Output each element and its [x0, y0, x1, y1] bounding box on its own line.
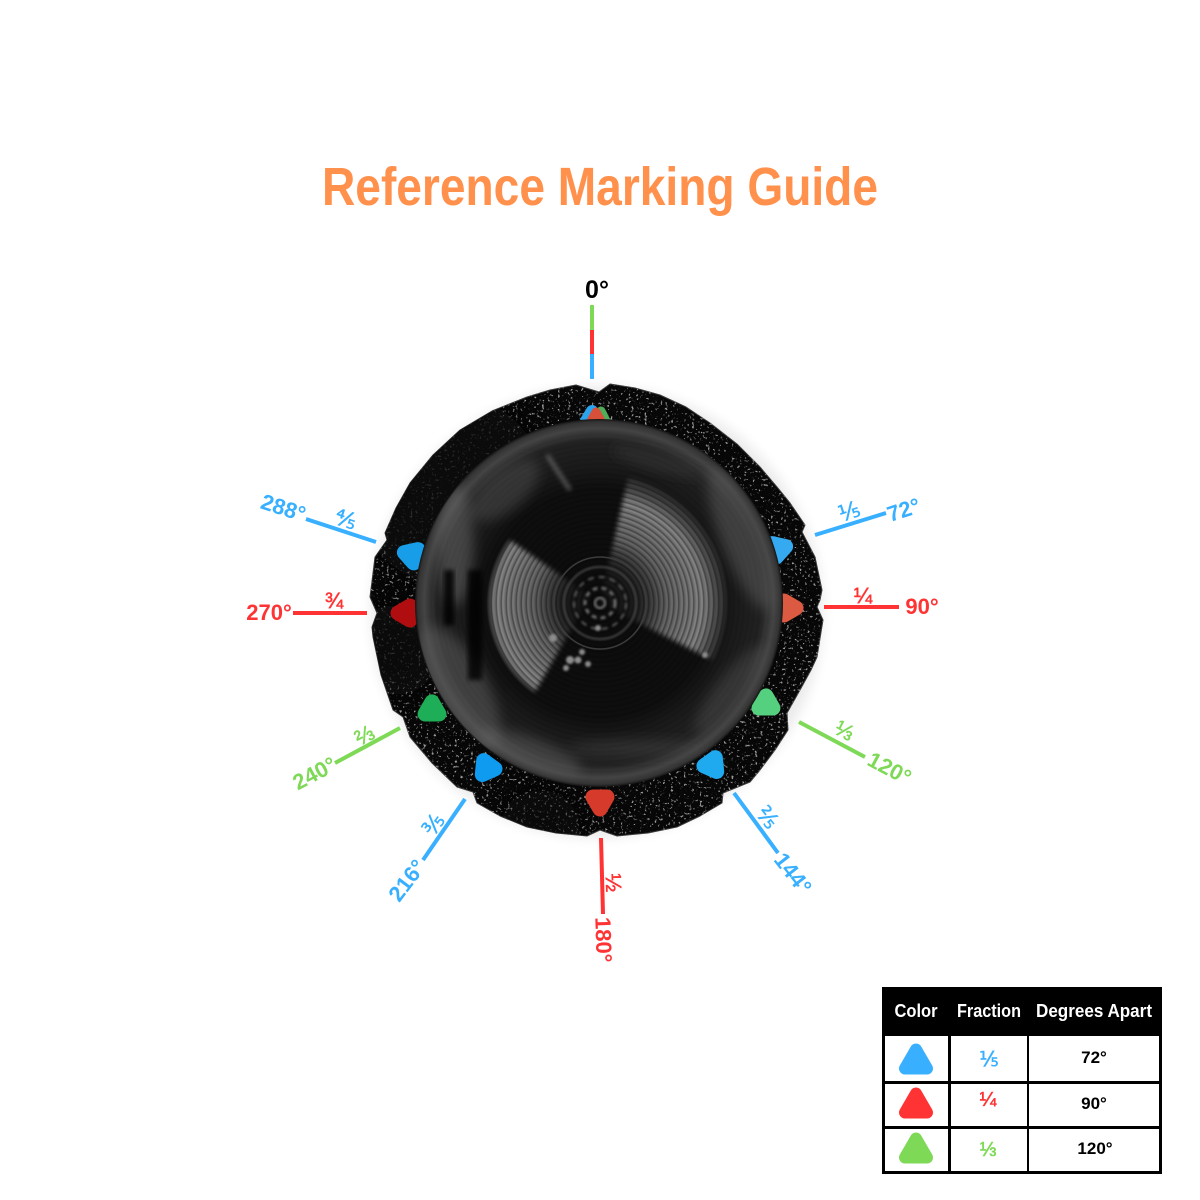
marker 90 degrees: ¼	[854, 583, 873, 608]
photo: 3D printed dial	[370, 384, 824, 839]
marker 0 degrees: tri-colour line and label: 0°	[585, 276, 609, 304]
mottled outer bowl wall	[418, 447, 772, 774]
row: one third: ⅓	[980, 1139, 997, 1161]
marker 144 degrees: 144°	[769, 848, 817, 899]
marker 90 degrees: 90°	[905, 594, 939, 619]
rim marker: 72 degrees blue	[772, 540, 788, 557]
table header: Degrees Apart	[1036, 1000, 1152, 1021]
table header	[894, 1000, 1152, 1021]
marker 72 degrees: 72°	[884, 493, 923, 527]
marker 90 degrees	[824, 583, 939, 619]
marker 180 degrees	[590, 838, 626, 963]
marker 180 degrees: 180°	[590, 917, 617, 963]
marker 288 degrees	[258, 489, 376, 542]
marker 120 degrees: ⅓	[831, 715, 858, 746]
dial rim with notches	[370, 384, 824, 839]
row: one fifth: ⅕	[979, 1049, 999, 1071]
rim marker: 240 degrees green	[422, 702, 439, 720]
row: one fifth: 72°	[1081, 1048, 1107, 1067]
row: one quarter	[885, 1084, 1159, 1126]
table header: Fraction	[957, 1000, 1021, 1021]
marker 240 degrees: 240°	[289, 752, 340, 795]
rim marker: 0 degrees, blue red green	[586, 411, 606, 421]
table header: Color	[894, 1000, 938, 1021]
dark bars left	[444, 570, 454, 625]
rim marker: 216 degrees blue	[477, 761, 495, 779]
rim marker: 180 degrees red	[593, 797, 607, 809]
marker 72 degrees	[815, 493, 923, 535]
faint rings over whole bowl	[432, 435, 768, 771]
rim marker: 270 degrees red	[398, 606, 410, 620]
marker 180 degrees: ½	[601, 873, 626, 892]
row: one quarter: ¼	[980, 1089, 997, 1111]
title: Reference Marking Guide	[322, 157, 878, 217]
specks below center	[549, 625, 708, 671]
marker 0 degrees: tri-colour line and label	[585, 276, 609, 379]
rim marker: 120 degrees green	[759, 696, 776, 714]
row: one third: 120°	[1077, 1139, 1113, 1158]
marker 240 degrees: ⅔	[350, 720, 378, 751]
marker 270 degrees: ¾	[325, 588, 344, 613]
marker 216 degrees: 216°	[383, 855, 431, 906]
marker 72 degrees: ⅕	[835, 496, 863, 527]
marker 144 degrees	[734, 793, 817, 899]
marker 120 degrees	[799, 715, 915, 790]
bright ray	[547, 455, 570, 490]
knob bowl	[415, 419, 783, 787]
row: one third	[885, 1129, 1159, 1171]
marker 270 degrees	[246, 588, 367, 625]
marker 288 degrees: ⅘	[332, 504, 360, 535]
row: one quarter: 90°	[1081, 1094, 1107, 1113]
marker 216 degrees: ⅗	[417, 808, 450, 841]
marker 216 degrees	[383, 799, 465, 906]
marker 240 degrees	[289, 720, 400, 795]
rim marker: 144 degrees blue	[704, 758, 722, 776]
rim marker: 90 degrees red	[784, 601, 796, 615]
marker 120 degrees: 120°	[864, 747, 915, 790]
faint rings around center	[554, 557, 646, 649]
marker 270 degrees: 270°	[246, 600, 292, 625]
legend table	[882, 987, 1162, 1174]
row: one fifth	[885, 1036, 1159, 1081]
light ring sectors	[487, 478, 728, 694]
marker 144 degrees: ⅖	[751, 801, 784, 833]
marker 288 degrees: 288°	[258, 489, 309, 527]
rim marker: 288 degrees blue	[402, 546, 418, 563]
